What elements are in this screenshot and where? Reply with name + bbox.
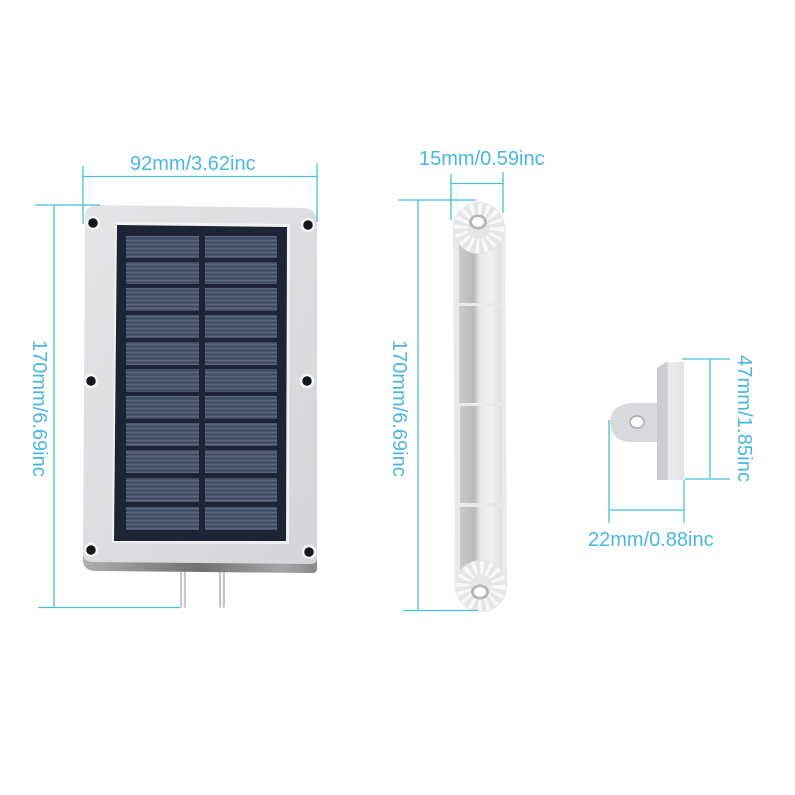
dimension: bar width [419,148,545,220]
dimension: bracket width: 22mm/0.88inc [588,529,714,551]
bracket tab [610,403,662,442]
dimension: bar width: 15mm/0.59inc [419,148,545,170]
dimension: bar height [388,200,478,610]
bracket [610,362,684,480]
screws [85,217,315,558]
dimension: bracket height: 47mm/1.85inc [733,355,755,482]
dimension: bracket width [588,420,714,551]
dimension: bar height: 170mm/6.69inc [388,340,410,477]
top ribbed end [453,202,505,254]
solar panel [83,205,317,608]
panel frame [83,205,317,564]
bracket plate [657,362,684,480]
dimension: panel height: 170mm/6.69inc [28,340,50,477]
dimension: panel width [83,153,317,224]
dimension: bracket height [682,355,755,482]
bottom ribbed end [455,560,507,612]
mounting bar [453,202,507,612]
solar cell area [112,222,290,544]
panel side edge [83,555,317,573]
bar body [453,228,507,586]
mounting feet [180,565,225,608]
dimension: panel width: 92mm/3.62inc [130,153,256,175]
dimension: panel height [28,205,180,608]
bar segments [459,241,502,571]
tab hole [630,416,644,428]
